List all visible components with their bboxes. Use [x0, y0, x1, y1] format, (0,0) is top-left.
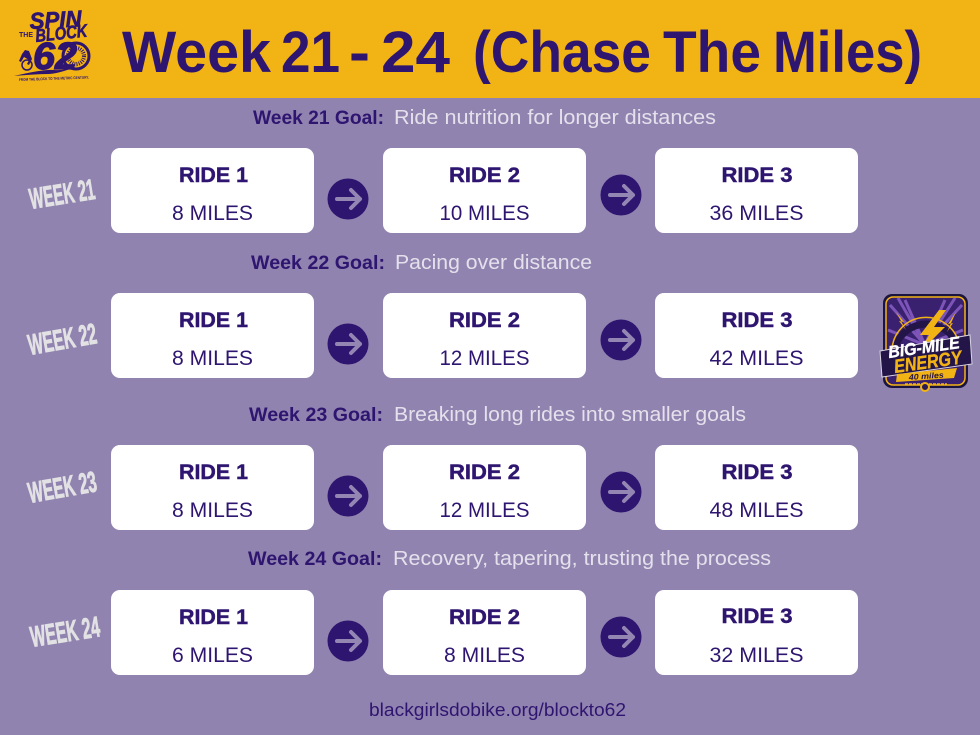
- week 24 goal: Recovery, tapering, trusting the process: [393, 548, 771, 570]
- week 24 ride 1: RIDE 1: [179, 605, 248, 629]
- badge: Big-Mile Energy 40 miles: BIG-MILE: [887, 333, 961, 362]
- badge: Big-Mile Energy 40 miles: ENERGY: [893, 347, 965, 378]
- week 21 ride 2: [383, 148, 586, 233]
- week 21 ride 2: RIDE 2: [449, 163, 520, 187]
- title: Week: [122, 20, 272, 85]
- week 21 ride 1: RIDE 1: [179, 163, 248, 187]
- miles tag: [896, 368, 957, 382]
- week 22 ride 3: 42 MILES: [710, 346, 804, 370]
- title: [122, 20, 922, 85]
- week 22 goal: Pacing over distance: [395, 252, 592, 274]
- week 22 goal: Week 22 Goal:: [251, 253, 385, 274]
- week 22 ride 2: 12 MILES: [440, 346, 530, 370]
- week 23 goal: [249, 404, 746, 426]
- lightning bolt: [919, 310, 946, 353]
- arrow: [600, 472, 642, 512]
- week 24 ride 1: [111, 590, 314, 675]
- title: The: [663, 20, 761, 85]
- badge: Big-Mile Energy 40 miles: 40 miles: [907, 371, 945, 382]
- week 22 ride 1: [111, 293, 314, 378]
- week 24 ride 2: [383, 590, 586, 675]
- week 22 ride 2: RIDE 2: [449, 308, 520, 332]
- arrow: [600, 320, 642, 360]
- week 23 ride 3: [655, 445, 858, 530]
- week 21 ride 1: [111, 148, 314, 233]
- week 21 ride 3: 36 MILES: [710, 201, 804, 225]
- week 21 ride 3: [655, 148, 858, 233]
- logo: Spin the Block 62: SPIN: [29, 5, 83, 34]
- arrow: [328, 476, 368, 516]
- week 21 ride 2: 10 MILES: [440, 201, 530, 225]
- arrow: [328, 620, 368, 662]
- week 22 ride 3: RIDE 3: [722, 308, 793, 332]
- week 22 ride 1: RIDE 1: [179, 308, 248, 332]
- logo: Spin the Block 62: THE: [19, 32, 33, 39]
- week 24 ride 2: 8 MILES: [444, 643, 525, 667]
- week 23 ride 1: 8 MILES: [172, 498, 253, 522]
- week 21 ride 1: 8 MILES: [172, 201, 253, 225]
- badge: Big-Mile Energy 40 miles: [880, 294, 972, 391]
- week 24 label: WEEK 24: [28, 611, 102, 654]
- week 23 goal: Breaking long rides into smaller goals: [394, 404, 746, 426]
- arrow: [600, 174, 642, 216]
- week 22 ride 2: [383, 293, 586, 378]
- week 24 goal: Week 24 Goal:: [248, 549, 382, 570]
- title: (Chase: [473, 20, 651, 85]
- arrow: [328, 178, 368, 220]
- week 23 ride 3: RIDE 3: [722, 460, 793, 484]
- week 23 goal: Week 23 Goal:: [249, 405, 383, 426]
- footer url: blackgirlsdobike.org/blockto62: [369, 700, 626, 720]
- arrow: [600, 616, 642, 658]
- title: -: [349, 20, 370, 85]
- week 24 ride 3: RIDE 3: [722, 604, 793, 628]
- week 23 ride 1: RIDE 1: [179, 460, 248, 484]
- week 21 goal: Week 21 Goal:: [253, 108, 384, 129]
- week 24 ride 1: 6 MILES: [172, 643, 253, 667]
- week 24 ride 3: 32 MILES: [710, 643, 804, 667]
- week 22 label: WEEK 22: [26, 318, 99, 362]
- logo: Spin the Block 62: 62: [33, 36, 77, 78]
- week 23 ride 1: [111, 445, 314, 530]
- title: Miles): [773, 20, 922, 85]
- week 22 goal: [251, 252, 592, 274]
- week 21 goal: Ride nutrition for longer distances: [394, 107, 716, 129]
- logo: Spin the Block 62: FROM THE BLOCK TO THE METRIC CENTURY.: [19, 76, 89, 82]
- ribbon: [880, 335, 972, 377]
- logo: Spin the Block 62: BLOCK: [34, 20, 90, 46]
- week 24 goal: [248, 548, 771, 570]
- week 23 ride 2: [383, 445, 586, 530]
- week 23 ride 2: 12 MILES: [440, 498, 530, 522]
- week 21 label: WEEK 21: [27, 174, 97, 216]
- week 24 ride 3: [655, 590, 858, 675]
- week 23 ride 2: RIDE 2: [449, 460, 520, 484]
- week 23 ride 3: 48 MILES: [710, 498, 804, 522]
- week 22 ride 1: 8 MILES: [172, 346, 253, 370]
- title: 21: [281, 20, 340, 85]
- title: 24: [381, 20, 450, 85]
- arrow: [328, 324, 368, 364]
- header band: [0, 0, 980, 98]
- week 22 ride 3: [655, 293, 858, 378]
- week 24 ride 2: RIDE 2: [449, 605, 520, 629]
- week 23 label: WEEK 23: [26, 466, 99, 510]
- week 21 goal: [253, 107, 716, 129]
- logo: Spin the Block 62: [14, 5, 90, 82]
- week 21 ride 3: RIDE 3: [722, 163, 793, 187]
